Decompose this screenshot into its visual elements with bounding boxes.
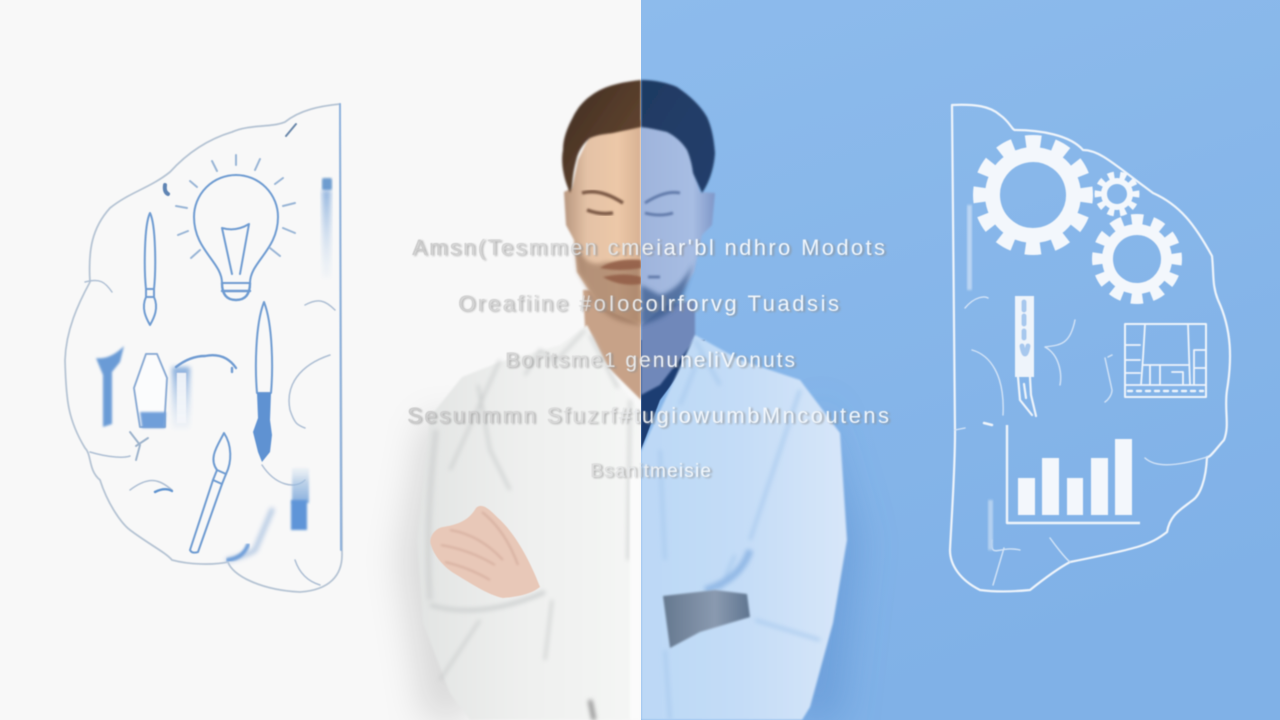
faint vertical bar: [967, 205, 972, 290]
icon: small gear: [1096, 173, 1138, 215]
hand left: [430, 506, 540, 598]
person: cool right half: [641, 80, 847, 720]
line 4: Sesunmmn Sfuzrf#tugiowumbMncoutens: [407, 403, 889, 428]
icon: faded tube: [172, 355, 236, 429]
neck left: [583, 290, 641, 400]
placket highlight: [630, 471, 634, 560]
panel: left creative brain: [65, 104, 342, 592]
forearm right: [663, 590, 750, 648]
bar chart: [1007, 425, 1140, 523]
shirt left: [422, 324, 610, 720]
brain folds right: [955, 297, 1207, 585]
line 2: Oreafiine #oIocolrforvg Tuadsis: [460, 292, 841, 317]
marks: small accents: [130, 124, 296, 492]
line 4: Sesunmmn Sfuzrf#tugiowumbMncoutens: [409, 404, 891, 429]
collar and shirt folds left: [428, 330, 630, 720]
line 5: Bsanitmeisie: [592, 462, 713, 483]
marks: faint accents: [984, 423, 993, 550]
eye and mouth right: [645, 192, 680, 277]
panel: right blue background: [641, 0, 1280, 720]
brain outline right: [950, 105, 1230, 591]
brow and eye left: [582, 192, 623, 214]
icon: large paintbrush: [253, 302, 272, 462]
undershirt: [641, 340, 705, 450]
neck right: [641, 300, 695, 395]
line 3: Boritsme1 genuneliVonuts: [505, 349, 795, 372]
bars: [1018, 439, 1132, 515]
icon: diagonal stroke: [228, 510, 272, 560]
line 5: Bsanitmeisie: [590, 461, 711, 482]
text block: five central lines: [407, 235, 891, 483]
brain outline left: [65, 104, 342, 592]
figure shadow right: [790, 400, 860, 720]
beard left: [574, 240, 641, 325]
hair left: [562, 80, 641, 193]
icon: faded tall bar: [322, 178, 332, 278]
icon: pen tool: [1015, 296, 1036, 416]
icon: medium gear: [1092, 214, 1182, 304]
icon: large gear: [973, 135, 1093, 255]
panel: right analytical brain: [950, 105, 1230, 591]
icon: diagonal paintbrush: [190, 433, 230, 553]
shirt right: [641, 335, 847, 720]
face left: [564, 120, 641, 325]
icon: blueprint: [1125, 324, 1206, 397]
brain folds: [85, 280, 335, 585]
icon: light bulb: [176, 155, 295, 300]
hair right: [641, 80, 715, 193]
figure shadow: [400, 420, 470, 720]
icon: paint bottle: [134, 354, 167, 428]
line 3: Boritsme1 genuneliVonuts: [507, 350, 797, 373]
line 2: Oreafiine #oIocolrforvg Tuadsis: [458, 291, 839, 316]
folds right: [660, 340, 820, 720]
line 1: Amsn(Tesmmen cmeiar'bl ndhro Modots: [414, 236, 887, 261]
icon: palette knife blue: [96, 346, 124, 427]
mustache and lips left: [600, 260, 641, 285]
person: warm left half: [417, 80, 641, 720]
icon: thin paintbrush: [144, 213, 156, 325]
line 1: Amsn(Tesmmen cmeiar'bl ndhro Modots: [412, 235, 885, 260]
panel: left white background: [0, 0, 641, 720]
face right: [641, 120, 715, 325]
brain right edge: [340, 104, 341, 550]
beard right: [641, 262, 694, 325]
icon: blue marker block: [291, 468, 309, 530]
